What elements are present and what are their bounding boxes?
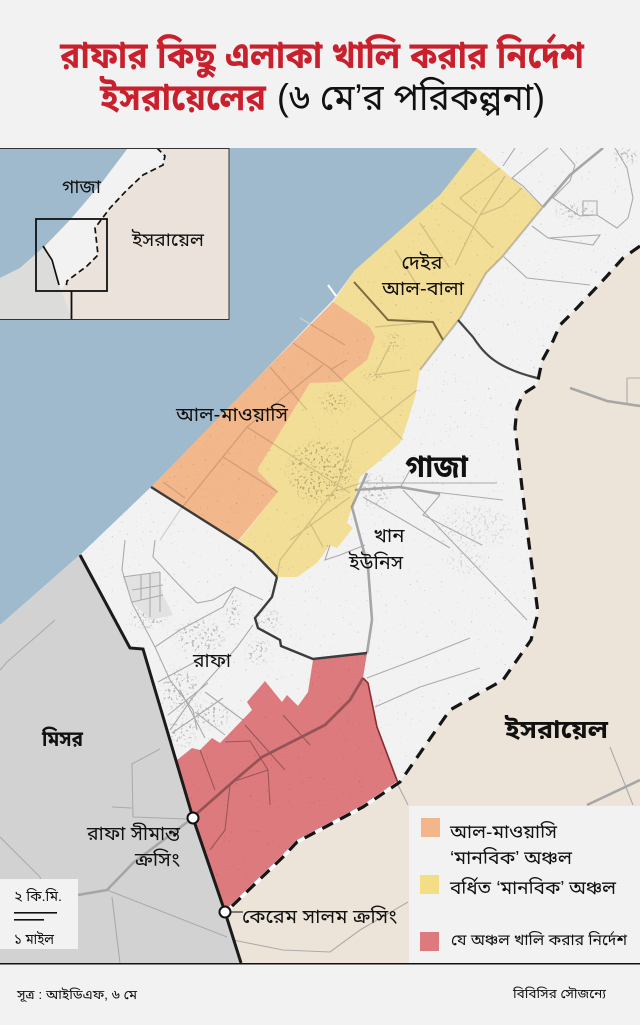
urban clusters [130,148,639,747]
title [59,34,585,118]
road: eastern edge of yellow zone [420,207,543,370]
legend swatch: expanded area [420,875,439,894]
inset label: Gaza: গাজা [62,177,101,197]
border: Israel-Gaza dashed [230,246,640,908]
label: Deir al-Balah: দেইর [402,251,443,274]
label: Al-Mawasi: আল-মাওয়াসি [175,403,289,426]
legend swatch: Al-Mawasi [421,818,440,837]
title: (৬ মে’র পরিকল্পনা) [277,76,545,118]
inset locator box [36,219,107,291]
legend swatch: evacuation area [420,932,439,951]
inset locator leader [70,291,72,319]
title: রাফার কিছু এলাকা খালি করার নির্দেশ [59,34,585,79]
Rafah [122,540,197,730]
Egypt [0,620,187,885]
label: Kerem Shalom crossing: কেরেম সালম ক্রসিং [242,905,398,928]
credit text: বিবিসির সৌজন্যে [512,986,606,1001]
label: Rafah border crossing: রাফা সীমান্ত [86,822,181,845]
governorate boundaries [151,282,537,659]
land: Egypt [0,555,241,963]
sea [0,148,477,625]
title: ইসরায়েলের [99,77,267,118]
scale bar: ২ কি.মি. [14,888,62,904]
marker: Rafah border crossing [188,812,198,824]
zone: orange Al-Mawasi humanitarian area [151,302,375,542]
zone: yellow expanded humanitarian area [238,148,543,577]
border: Egypt-Gaza [80,555,241,963]
label: Khan Younis: ইউনিস [348,551,404,574]
north-east [503,148,633,228]
texture: Gaza scattered buildings [80,148,640,908]
inset frame [0,148,229,320]
road: Salah al-Din through red zone [193,678,363,817]
scale bar: ১ মাইল [14,931,55,947]
label: Rafah border crossing [86,822,181,871]
red zone outline [363,678,398,783]
label: Rafah border crossing: ক্রসিং [134,848,181,871]
land: Israel [225,246,640,963]
label: Egypt: মিসর [41,727,83,751]
Israel [610,378,640,805]
port breakwater [328,285,336,296]
label: Khan Younis [348,528,405,570]
inset label: Israel: ইসরায়েল [131,230,205,250]
legend text: Al-Mawasi: আল-মাওয়াসি [449,822,558,842]
land: Gaza strip [0,148,640,963]
inset Israel border [66,148,165,288]
label: Deir al-Balah [382,252,464,295]
legend text: evacuation area: যে অঞ্চল খালি করার নির্দেশ [451,931,628,949]
map [0,148,640,963]
label: Gaza: গাজা [405,449,469,484]
inset Gaza strip [45,148,165,290]
Rafah planned neighbourhood blocks [123,572,173,620]
label: Israel: ইসরায়েল [504,715,609,744]
map bottom rule [0,963,640,964]
legend text: Al-Mawasi: ‘মানবিক’ অঞ্চল [450,848,573,868]
inset sea [0,148,128,278]
inset locator map [0,148,229,320]
scale bar [0,879,78,949]
legend text: Al-Mawasi [449,822,573,868]
label: Khan Younis: খান [374,526,405,547]
legend text: expanded area: বর্ধিত ‘মানবিক’ অঞ্চল [449,877,617,898]
roads inside yellow and orange zones [160,168,522,577]
border: Israel-Gaza white casing [230,783,398,908]
marker: Kerem Shalom crossing [220,906,230,918]
zone: red evacuation area [177,653,398,912]
roads: thin grey [0,148,640,963]
Khan Younis and east [363,470,527,620]
inset Egypt border [43,246,59,285]
roads: thick grey [78,148,640,895]
label: Deir al-Balah: আল-বালা [381,279,465,300]
inset Egypt [0,246,72,319]
label: Rafah: রাফা [192,651,232,672]
roads inside red zone [200,715,310,850]
source text: সূত্র : আইডিএফ, ৬ মে [16,987,138,1003]
legend panel [409,806,640,963]
connector: Kerem Shalom [231,912,243,913]
